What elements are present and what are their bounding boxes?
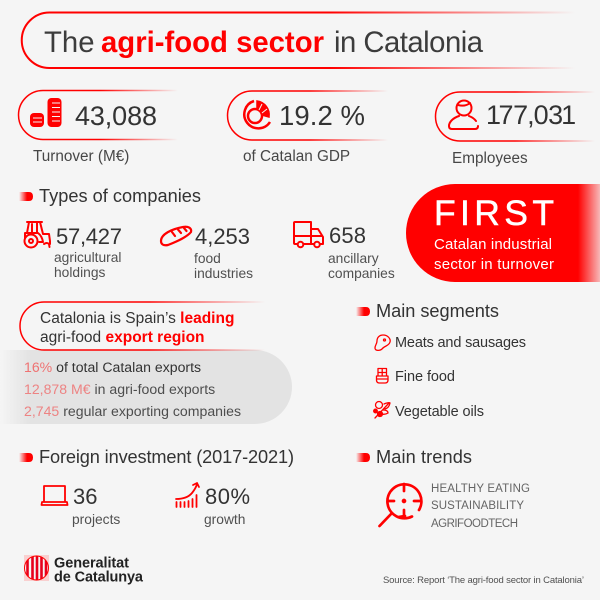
title: The [44,26,94,59]
value: 19.2 %: 19.2 % [279,100,365,131]
icon: olive branch [374,402,390,418]
text: export stats: 2,745 regular exporting companies [24,403,241,419]
stat: turnover [19,90,178,165]
text: trends: HEALTHY EATING [431,483,530,495]
icon: magnifier target [380,484,421,526]
value: 43,088: 43,088 [75,101,157,131]
label: employees: Employees [452,150,528,167]
company: food industries [161,224,253,281]
source: Source: Report ‘The agri-food sector in Catalonia’ [383,575,584,586]
text: FIRST: FIRST [434,193,554,233]
icon: person [449,100,478,129]
icon: growth chart [176,483,199,507]
value: 4,253: 4,253 [195,224,250,249]
icon: tractor [24,222,50,248]
title: in Catalonia [334,26,484,59]
text: export stats: 12,878 M€ in agri-food exports [24,381,215,397]
icon: fine food [376,368,388,383]
label: food industries: industries [194,266,253,281]
label: food industries: food [194,251,221,266]
label: agricultural holdings: holdings [54,265,105,280]
segment: meats: Meats and sausages [395,335,526,351]
title: agri-food sector [101,26,324,59]
heading: foreign investment: Foreign investment (2017-2021) [39,447,294,467]
text: trends: SUSTAINABILITY [431,500,524,512]
icon: meat [375,335,390,350]
panel: main trends [380,483,530,530]
value: 658: 658 [329,223,366,248]
panel: first [406,184,600,282]
panel: export grey [0,350,292,424]
logo: Generalitat de Catalunya: de Catalunya [54,570,144,586]
heading: main trends: Main trends [376,447,472,467]
heading: main segments: Main segments [376,301,499,321]
icon: truck [294,222,323,247]
label: projects: projects [72,512,120,527]
company: ancillary companies [294,222,395,281]
label: GDP: of Catalan GDP [243,148,350,165]
segment: vegetable oils: Vegetable oils [395,404,484,420]
stat: employees [435,92,595,167]
icon: coins [30,98,62,127]
stat: GDP [228,91,388,165]
label: agricultural holdings: agricultural [54,250,121,265]
callout: export region [20,302,265,350]
icon: donut chart [244,101,270,128]
icon: logo emblem [24,555,49,581]
value: 80%: 80% [205,484,250,509]
segment: vegetable oils [374,402,484,420]
segment: fine food: Fine food [395,369,455,385]
text: first description: sector in turnover [434,256,554,273]
value: 57,427: 57,427 [56,224,122,249]
value: 36: 36 [73,484,97,509]
label: ancillary companies: ancillary [328,251,379,266]
icon: laptop [42,486,68,505]
stat: growth [176,483,250,527]
label: turnover: Turnover (M€) [33,148,129,165]
callout: export region: agri-food export region [40,329,205,346]
title [22,12,575,68]
label: ancillary companies: companies [328,266,395,281]
label: growth: growth [204,512,245,527]
logo: Generalitat de Catalunya [24,555,144,586]
callout: export region: Catalonia is Spain’s leading [40,310,234,327]
company: agricultural holdings [24,222,122,280]
heading: types of companies: Types of companies [39,186,201,206]
stat: projects [42,484,120,527]
text: trends: AGRIFOODTECH [431,518,518,530]
icon: bread [161,227,191,245]
value: 177,031: 177,031 [486,100,576,130]
logo: Generalitat de Catalunya: Generalitat [54,556,129,572]
text: export stats: 16% of total Catalan exports [24,359,201,375]
text: first description: Catalan industrial [434,236,552,253]
